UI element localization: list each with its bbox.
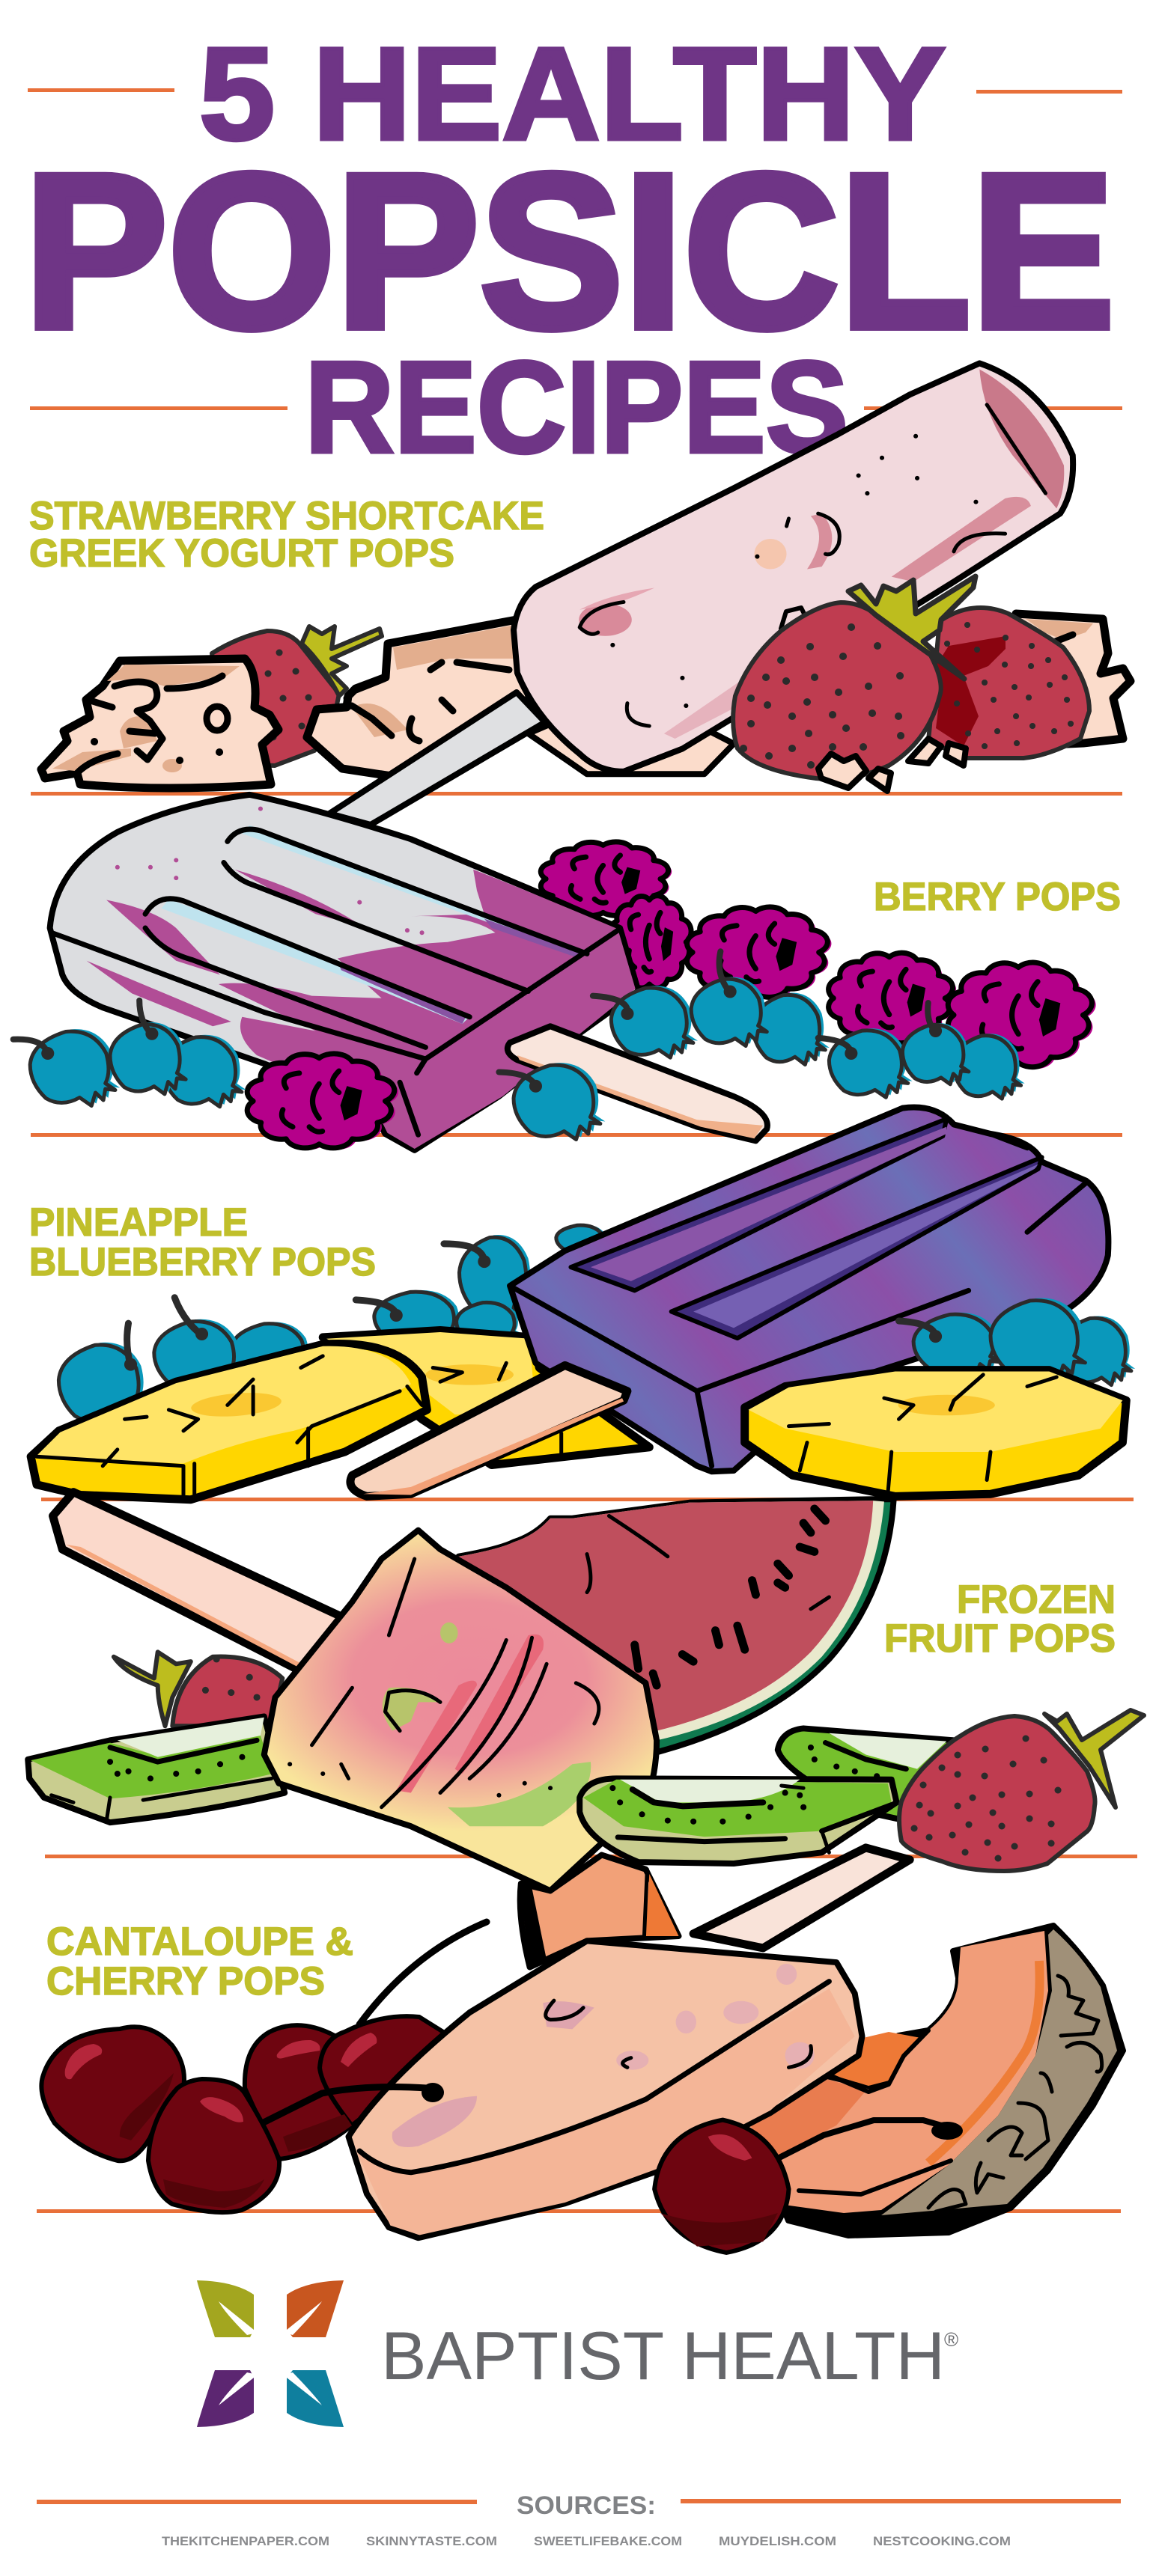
pop body: [514, 363, 1073, 774]
front-left cherry: [148, 2079, 279, 2212]
left cherry: [41, 2027, 184, 2161]
stick: [53, 1492, 356, 1681]
illustration: berry pop: [13, 795, 1096, 1150]
recipe label: cantaloupe cherry: CANTALOUPE &: [46, 1920, 353, 1964]
back strawberry: [928, 608, 1089, 758]
sources heading: SOURCES:: [517, 2491, 656, 2520]
sources: [162, 2491, 1011, 2548]
pop body: [349, 1941, 862, 2238]
raspberries behind pop: [541, 842, 693, 989]
watermelon: [458, 1499, 894, 1752]
illustration: frozen fruit pop: [28, 1492, 954, 1890]
logo mark: [197, 2280, 344, 2427]
source list: MUYDELISH.COM: [719, 2534, 836, 2548]
wordmark: BAPTIST HEALTH: [381, 2319, 945, 2394]
front-left pineapple: [31, 1344, 427, 1500]
pop chip: [781, 608, 805, 636]
blueberries: [13, 951, 1025, 1139]
stem on pop: [262, 2083, 444, 2123]
recipe label: frozen fruit: [884, 1578, 1116, 1661]
front-right pineapple: [745, 1370, 1126, 1496]
title: 5 HEALTHY: [199, 21, 946, 168]
registered mark: ®: [944, 2328, 958, 2351]
left kiwi: [28, 1716, 285, 1822]
recipe label: pineapple blueberry: BLUEBERRY POPS: [29, 1240, 376, 1284]
source list: SKINNYTASTE.COM: [366, 2534, 497, 2548]
left strawberry: [114, 1652, 282, 1726]
blueberries in front of pop: [898, 1298, 1135, 1385]
title: POPSICLE: [24, 129, 1115, 374]
left shortcake chunk: [41, 659, 279, 788]
recipe label: strawberry shortcake: [29, 494, 544, 576]
recipe label: berry pops: BERRY POPS: [874, 875, 1121, 919]
pop body: [264, 1530, 657, 1890]
long stem: [359, 1922, 487, 2024]
middle shortcake chunk: [307, 620, 532, 778]
logo: Baptist Health: [197, 2280, 958, 2427]
raspberries: [247, 907, 1096, 1150]
stick: [350, 1365, 627, 1496]
pop body: [50, 795, 639, 1150]
right shortcake chunk: [973, 614, 1131, 748]
source list: [162, 2534, 1011, 2548]
recipe label: frozen fruit: FRUIT POPS: [884, 1617, 1116, 1661]
source list: NESTCOOKING.COM: [873, 2534, 1011, 2548]
recipe label: pineapple blueberry: PINEAPPLE: [29, 1200, 248, 1245]
blueberries behind: [58, 1224, 609, 1423]
front strawberry: [733, 576, 976, 779]
back cherries: [245, 2016, 449, 2159]
right strawberry: [899, 1710, 1144, 1871]
stick: [329, 692, 545, 825]
stick: [693, 1848, 910, 1948]
recipe label: cantaloupe cherry: CHERRY POPS: [46, 1959, 325, 2003]
left strawberry: [212, 626, 382, 766]
recipe label: frozen fruit: FROZEN: [957, 1578, 1116, 1622]
illustration: strawberry shortcake pop: [41, 363, 1131, 825]
source list: THEKITCHENPAPER.COM: [162, 2534, 329, 2548]
middle kiwi: [579, 1778, 897, 1864]
title: RECIPES: [305, 334, 848, 480]
recipe label: cantaloupe cherry: [46, 1920, 353, 2003]
front-right cherry: [654, 2120, 789, 2253]
cantaloupe wedge: [749, 1926, 1123, 2235]
pop body: [510, 1107, 1108, 1471]
illustration: cantaloupe and cherry pop: [41, 1848, 1123, 2253]
back pineapple: [323, 1331, 649, 1465]
illustration: pineapple blueberry pop: [31, 1107, 1135, 1500]
recipe label: strawberry shortcake: STRAWBERRY SHORTCAKE: [29, 494, 544, 538]
recipe label: pineapple blueberry: [29, 1200, 376, 1284]
recipe label: strawberry shortcake: GREEK YOGURT POPS: [29, 531, 454, 576]
stick: [508, 1026, 767, 1141]
source list: SWEETLIFEBAKE.COM: [534, 2534, 682, 2548]
right kiwi: [778, 1728, 954, 1822]
title: [24, 21, 1115, 480]
illustration: cantaloupe back slice: [520, 1855, 678, 1967]
crumbs: [818, 739, 966, 791]
